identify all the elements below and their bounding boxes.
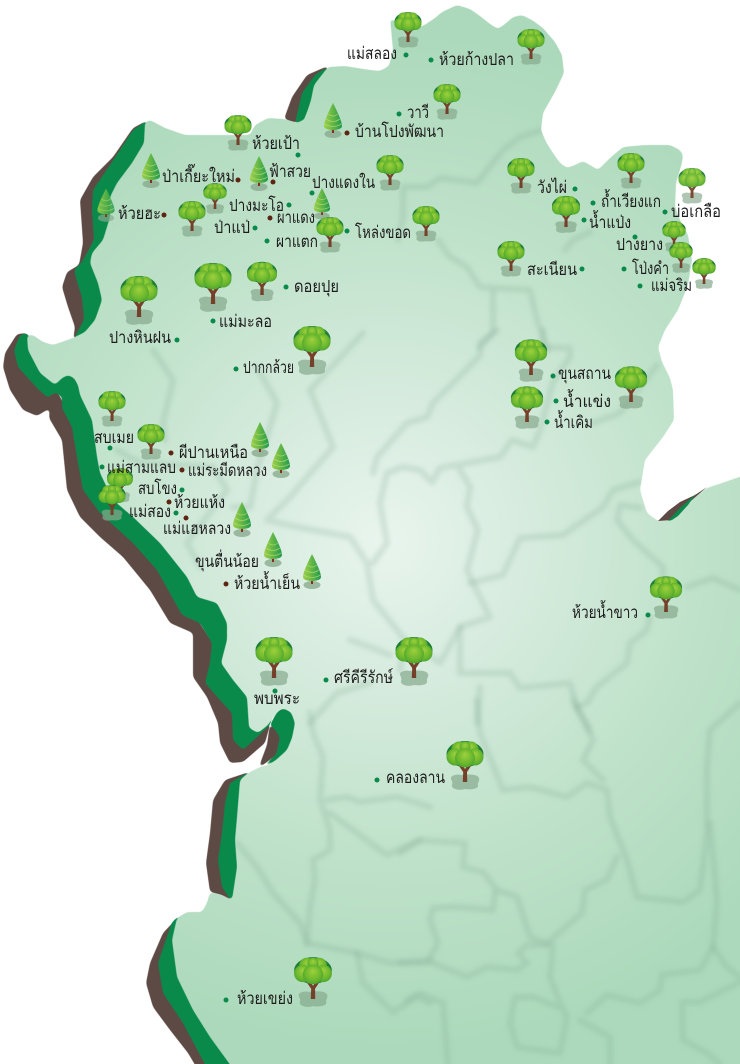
icon: pine trees [97, 103, 342, 589]
label: ดอยปุย: ดอยปุย [294, 277, 339, 297]
label: โป่งคำ [622, 258, 669, 278]
label: ขุนตื่นน้อย: ขุนตื่นน้อย [195, 549, 259, 572]
label: ผาแดง [268, 208, 315, 227]
label: ป่าแป่: ป่าแป่ [214, 218, 250, 237]
label: บ่อเกลือ: บ่อเกลือ [671, 202, 721, 221]
label: แม่แฮหลวง: แม่แฮหลวง [163, 519, 231, 538]
label: คลองลาน: คลองลาน [386, 768, 445, 787]
label: น้ำเคิม: น้ำเคิม [554, 410, 593, 432]
label: ห้วยเขย่ง: ห้วยเขย่ง [237, 989, 293, 1008]
label: ปางแดงใน [310, 172, 375, 196]
coast strip: northwest brown [62, 120, 148, 340]
label: แม่มะลอ: แม่มะลอ [219, 312, 272, 331]
coast strip: north ridge green [295, 65, 330, 125]
label: ห้วยก้างปลา: ห้วยก้างปลา [439, 50, 514, 69]
label: พบพระ: พบพระ [254, 689, 300, 708]
label: น้ำแป่ง [582, 210, 631, 232]
location labels [94, 44, 721, 1008]
label: สบเมย: สบเมย [94, 428, 134, 447]
label: ห้วยน้ำเย็น [224, 571, 300, 593]
label: ปางหินฝน: ปางหินฝน [109, 328, 171, 347]
label: ป่าเกี๊ยะใหม่: ป่าเกี๊ยะใหม่ [162, 163, 235, 186]
label: ฟ้าสวย: ฟ้าสวย [269, 162, 311, 181]
label: ปางแดงใน: ปางแดงใน [312, 172, 375, 192]
label: ผีปานเหนือ: ผีปานเหนือ [179, 443, 248, 462]
label: น้ำเคิม [544, 410, 593, 432]
label: ผาแตก [264, 232, 318, 251]
coast hook: brown inner [258, 723, 280, 769]
label: ขุนสถาน: ขุนสถาน [558, 364, 611, 384]
label: ถ้ำเวียงแก: ถ้ำเวียงแก [601, 189, 661, 211]
coast strip: northwest green [73, 120, 148, 340]
coast strip: southwest green [218, 772, 255, 902]
coast strip: east notch [658, 487, 707, 521]
label: บ้านโปงพัฒนา: บ้านโปงพัฒนา [355, 121, 444, 141]
district boundary lines [117, 130, 740, 1064]
label: ห้วยฮะ: ห้วยฮะ [118, 204, 161, 223]
label: ผาแตก: ผาแตก [276, 232, 318, 251]
label: ห้วยเป้า: ห้วยเป้า [252, 134, 300, 153]
label: ห้วยน้ำขาว: ห้วยน้ำขาว [572, 600, 638, 622]
coast strip: south brown [146, 916, 240, 1064]
coast strip: southwest brown [206, 772, 250, 902]
label: ปางมะโอ: ปางมะโอ [229, 195, 284, 215]
label: สบโขง: สบโขง [138, 478, 177, 498]
coast strip: west green [14, 333, 280, 750]
label: ปางยาง: ปางยาง [616, 235, 663, 254]
label: วังไผ่: วังไผ่ [537, 177, 567, 197]
label: ห้วยแห้ง: ห้วยแห้ง [174, 493, 225, 512]
label: ห้วยน้ำเย็น: ห้วยน้ำเย็น [234, 571, 300, 593]
coast strip: north ridge brown [284, 65, 330, 123]
label: แม่สามแลบ: แม่สามแลบ [107, 458, 176, 477]
label: น้ำแป่ง: น้ำแป่ง [589, 210, 631, 232]
label: วาวี [396, 103, 429, 122]
label: ศรีคีรีรักษ์: ศรีคีรีรักษ์ [334, 668, 393, 687]
label: ปากกล้วย [234, 358, 294, 377]
label: โหล่งขอด: โหล่งขอด [355, 222, 411, 242]
label: แม่จริม: แม่จริม [651, 276, 692, 295]
coast hook: green blob [260, 708, 297, 769]
label: ปากกล้วย: ปากกล้วย [243, 358, 294, 377]
label: ถ้ำเวียงแก [590, 189, 661, 211]
label: โป่งคำ: โป่งคำ [632, 258, 669, 278]
label: ผาแดง: ผาแดง [277, 208, 315, 227]
label: โหล่งขอด [344, 222, 411, 242]
icon: broadleaf trees [98, 12, 716, 1007]
label: แม่สอง: แม่สอง [129, 502, 171, 521]
label: ดอยปุย [284, 277, 339, 297]
coast strip: west brown [3, 333, 270, 763]
label: สะเนียน: สะเนียน [527, 260, 577, 279]
label: วาวี: วาวี [407, 103, 429, 122]
label: แม่จริม [638, 276, 692, 295]
label: น้ำแข่ง: น้ำแข่ง [563, 389, 611, 411]
label: แม่สลอง: แม่สลอง [347, 44, 397, 63]
coast strip: south green [158, 916, 240, 1064]
label: แม่ระมีดหลวง: แม่ระมีดหลวง [188, 461, 267, 480]
label: น้ำแข่ง [554, 389, 611, 411]
